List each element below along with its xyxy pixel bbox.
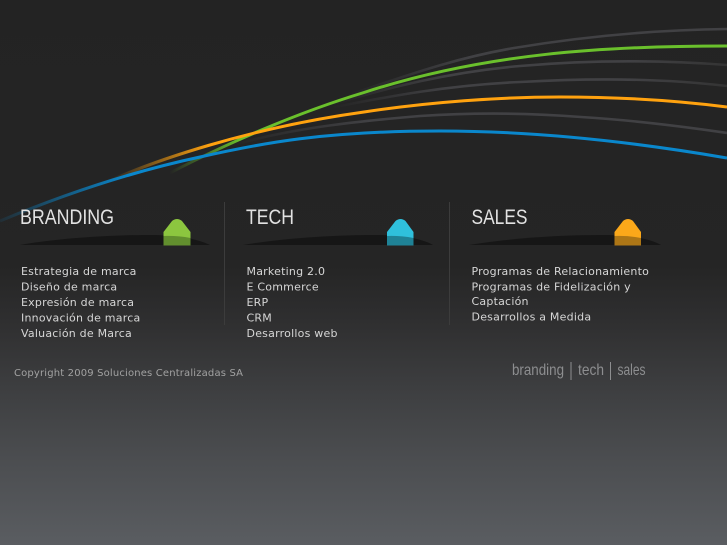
tagline <box>512 362 646 380</box>
list: tech services: E Commerce <box>246 280 319 294</box>
icon: cyan marker with shadow <box>243 219 433 246</box>
list: tech services: CRM <box>246 312 272 324</box>
list: branding services: Diseño de marca <box>21 280 117 294</box>
decorative curves <box>0 29 727 221</box>
heading: sales: SALES <box>472 206 528 229</box>
tagline: branding <box>512 362 564 379</box>
divider <box>224 202 225 325</box>
list: branding services: Estrategia de marca <box>21 265 137 278</box>
divider <box>449 202 450 325</box>
heading: branding: BRANDING <box>20 206 114 229</box>
list: sales services: Programas de Relacionamiento <box>472 265 649 278</box>
panel: tech <box>243 206 433 340</box>
tagline: sales <box>618 362 646 379</box>
heading: tech: TECH <box>246 206 294 229</box>
list: branding services: Valuación de Marca <box>21 327 132 340</box>
list: tech services: Marketing 2.0 <box>246 265 325 278</box>
list: branding services: Expresión de marca <box>21 296 134 309</box>
list: sales services: Programas de Fidelización y <box>472 280 631 294</box>
copyright: Copyright 2009 Soluciones Centralizadas SA <box>14 368 243 379</box>
list: sales services: Captación <box>472 295 529 308</box>
list: tech services: ERP <box>246 296 269 309</box>
list: branding services: Innovación de marca <box>21 312 140 324</box>
panel: sales <box>469 206 661 324</box>
icon: orange marker with shadow <box>469 219 661 246</box>
panel: branding <box>20 206 210 340</box>
list: sales services: Desarrollos a Medida <box>472 310 591 324</box>
list: tech services: Desarrollos web <box>246 327 338 340</box>
icon: green marker with shadow <box>20 219 210 246</box>
tagline: tech <box>578 362 604 379</box>
